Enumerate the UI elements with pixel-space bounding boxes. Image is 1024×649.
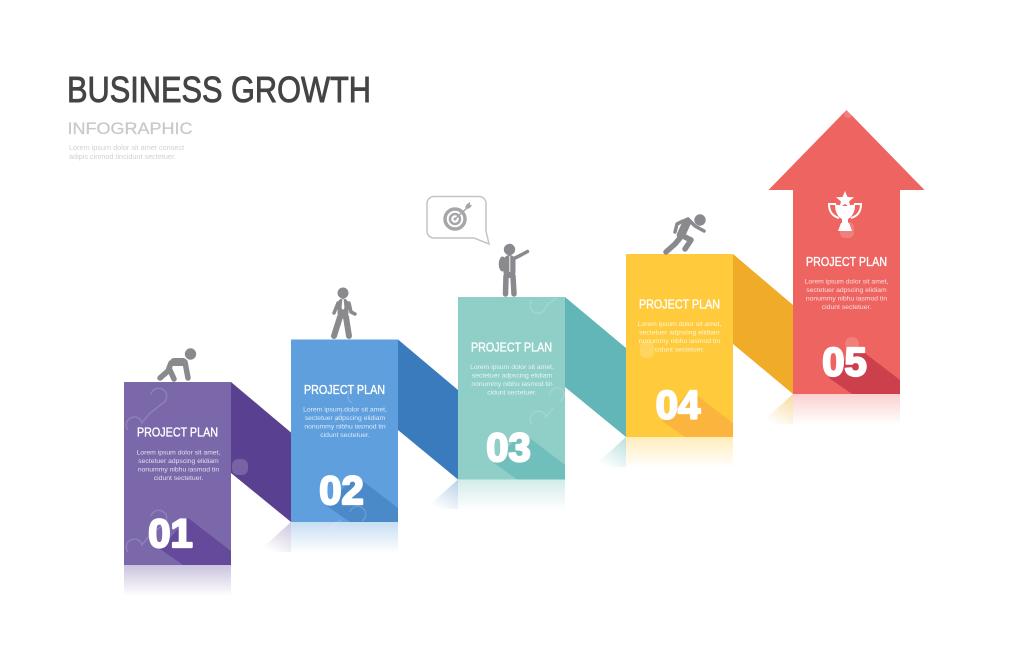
ribbon connector 2 to 3 [398,340,458,480]
subtitle: INFOGRAPHIC [68,120,193,138]
step 04 body text: cidunt sectetuer. [655,346,704,354]
step 03 reflection [458,480,565,510]
step 05 number: 05 [822,340,867,384]
step 01 body text: nonummy nibhu iasmod tin [138,466,219,474]
step 01 heading: PROJECT PLAN [137,426,218,440]
step 02 body text: cidunt sectetuer. [320,432,370,439]
icon: crouching person [160,348,196,379]
step 04 number: 04 [656,384,701,428]
step 03 long shadow [494,432,565,480]
step 05 body text [805,278,889,311]
icon: speech bubble with target [427,196,489,244]
panel: step 05 arrow [760,110,924,425]
panel: step 03 [425,297,565,510]
step 01 block [124,382,231,565]
intro text: adipis cinmod tincidunt sectetuer. [69,152,176,161]
ribbon connector 3 to 4 [565,297,626,437]
step 03 body text: cidunt sectetuer. [487,390,537,396]
step 02 body text [303,406,387,439]
step 05 arrow shape [768,110,924,394]
step 01 number: 01 [148,512,193,556]
step 05 body text: Lorem ipsum dolor sit amet, [805,278,889,286]
step 03 number: 03 [486,426,531,470]
step 01 reflection [124,565,231,596]
step 03 body text [470,364,554,396]
panel: step 02 [258,340,398,553]
step 02 heading: PROJECT PLAN [304,383,385,397]
step 05 ribbon reflection [760,394,793,424]
step 01 body text: sectetuer adpscing elidiam [138,458,219,465]
step 04 ribbon reflection [593,437,626,467]
panel: step 01 [124,382,231,596]
step 05 long shadow [829,347,900,394]
step 04 heading: PROJECT PLAN [639,298,720,312]
step 04 body text [638,321,722,354]
intro text: Lorem ipsum dolor sit amet consect [69,143,185,152]
step 05 body text: cidunt sectetuer. [822,304,871,311]
step 03 ribbon reflection [425,480,458,509]
step 05 body text: sectetuer adpscing elidiam [806,287,887,294]
step 03 body text: nonummy nibhu iasmod tin [471,381,553,388]
step 02 ribbon reflection [258,522,291,552]
step 03 block [458,297,565,480]
step 02 body text: nonummy nibhu iasmod tin [304,424,386,430]
step 04 body text: sectetuer adpscing elidiam [639,330,720,336]
step 05 heading: PROJECT PLAN [806,255,887,269]
step 02 body text: sectetuer adpscing elidiam [305,415,386,422]
step 03 watermark [530,298,564,424]
watermark marks [232,110,859,475]
step 02 block [291,340,398,522]
step 04 long shadow [662,390,733,437]
icon: running person [666,214,706,252]
ribbon connector 4 to 5 [733,254,793,394]
title: BUSINESS GROWTH [67,69,371,110]
step 02 reflection [291,522,398,553]
step 01 body text: cidunt sectetuer. [154,475,203,482]
icon: trophy [829,191,861,231]
step 01 body text: Lorem ipsum dolor sit amet, [137,450,221,456]
step 04 body text: Lorem ipsum dolor sit amet, [638,321,722,328]
step 05 body text: nonummy nibhu iasmod tin [806,296,887,302]
intro text [69,143,185,161]
icon: person pointing [499,244,528,294]
step 04 reflection [626,437,733,468]
step 02 body text: Lorem ipsum dolor sit amet, [303,406,387,414]
step 03 body text: Lorem ipsum dolor sit amet, [470,364,554,371]
step 04 body text: nonummy nibhu iasmod tin [639,338,720,345]
step 01 watermark [126,388,167,552]
step 05 reflection [793,394,900,425]
step 03 heading: PROJECT PLAN [471,340,552,354]
icon: walking person [334,288,355,336]
step 03 body text: sectetuer adpscing elidiam [472,372,553,380]
ribbon connector 1 to 2 [231,382,291,522]
step 01 body text [137,450,221,482]
step 02 watermark [327,388,366,530]
step 02 long shadow [327,475,398,522]
step 04 block [626,254,733,437]
step 01 long shadow [160,518,231,565]
step 02 number: 02 [319,469,364,513]
panel: step 04 [593,254,733,468]
